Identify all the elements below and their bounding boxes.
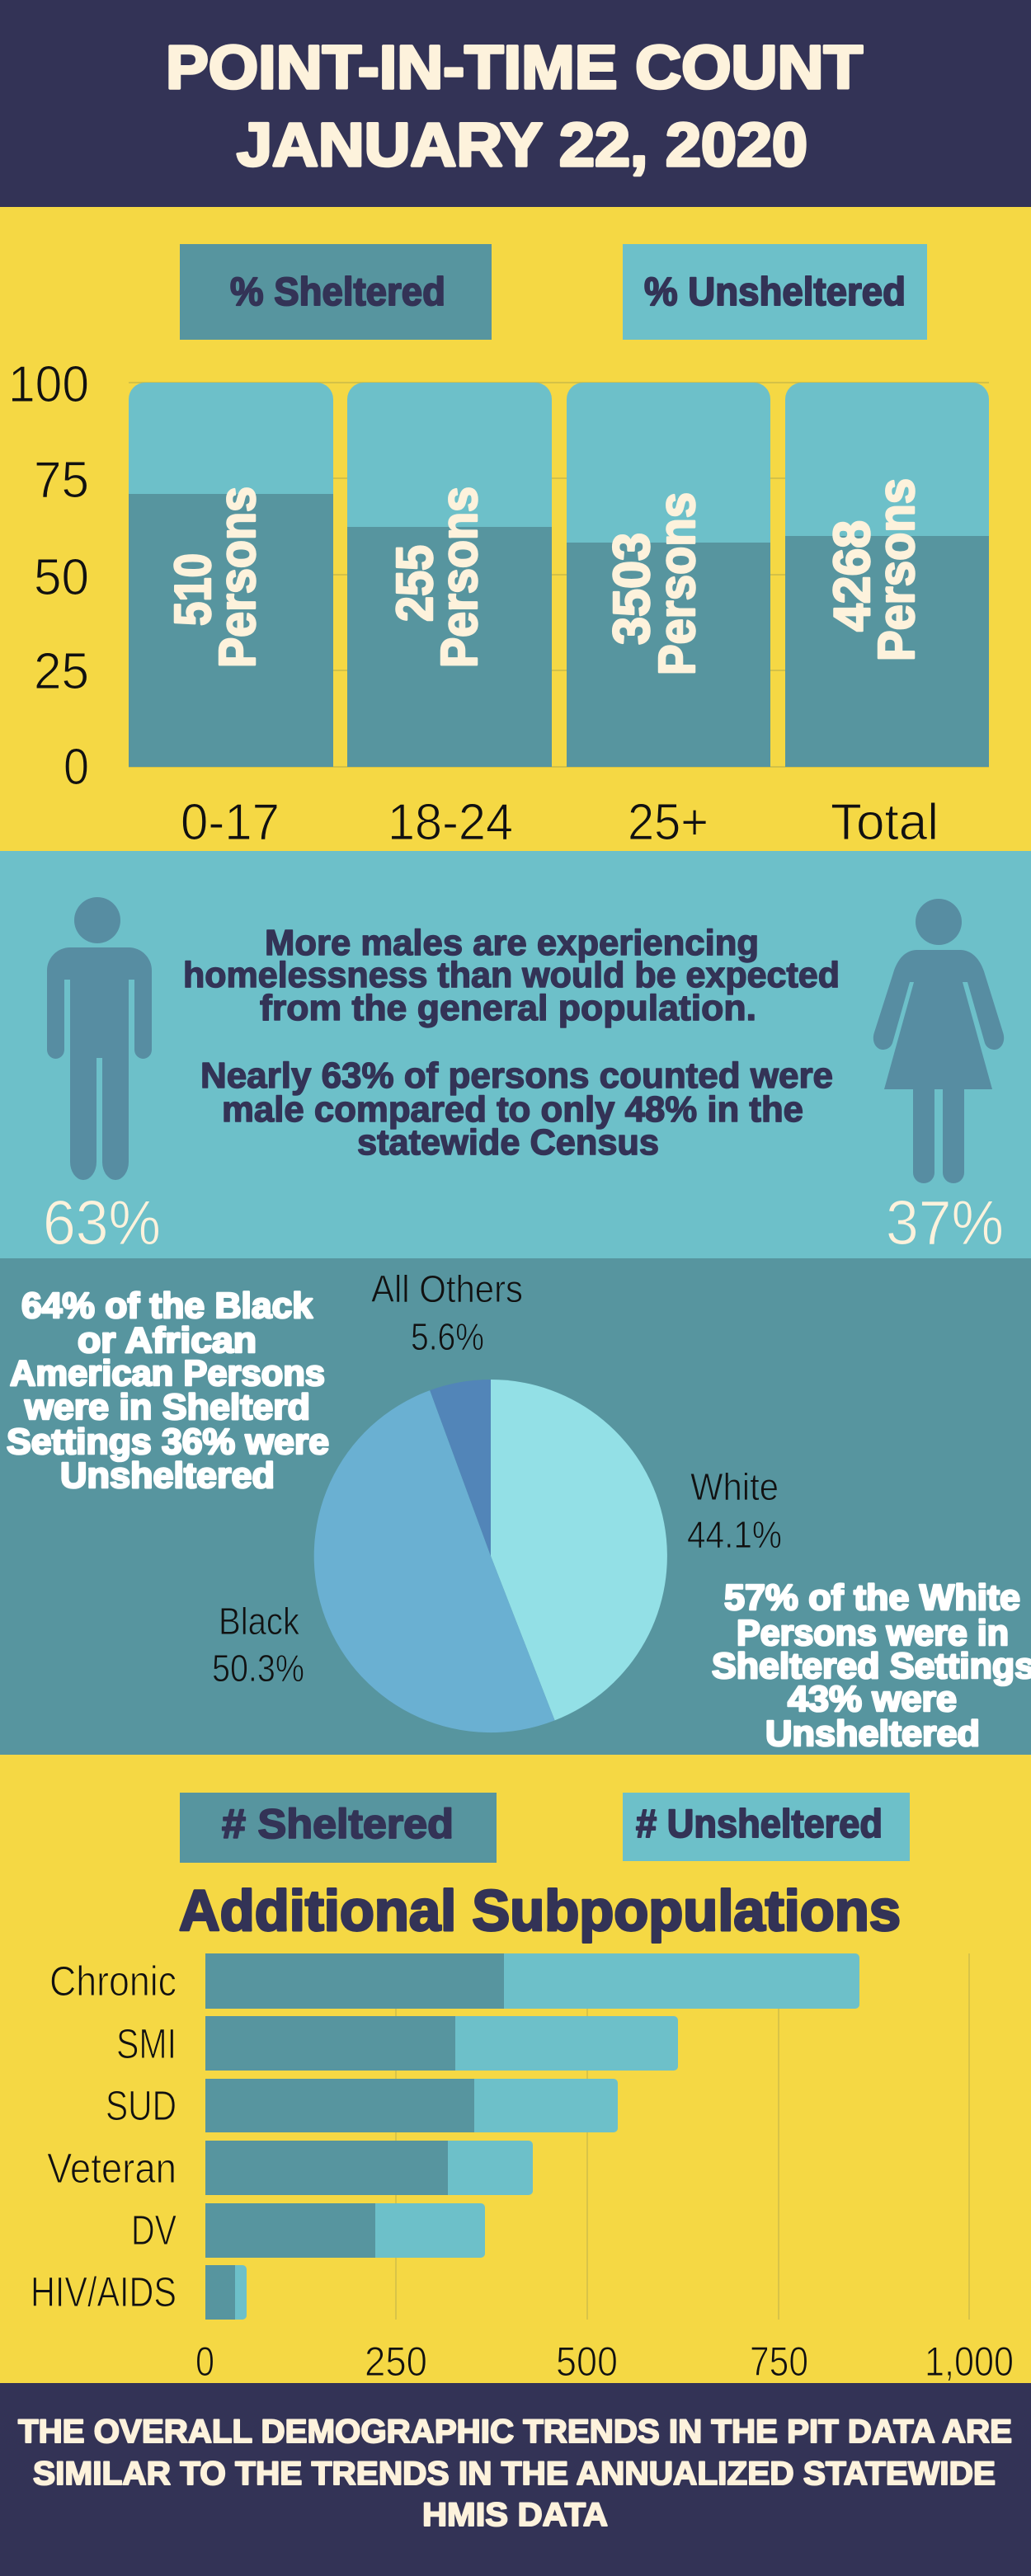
callout: Black or African American persons: or African <box>78 1320 257 1361</box>
bar: 25+: Persons <box>649 492 706 675</box>
category labels: SUD <box>106 2082 177 2129</box>
y axis labels: 100 <box>8 356 89 413</box>
callout: Black or African American persons <box>7 1286 329 1496</box>
category labels <box>31 1958 177 2315</box>
pie labels: 44.1% <box>687 1513 782 1556</box>
legend: number sheltered <box>180 1793 497 1863</box>
bar: 0-17: Persons <box>209 487 266 668</box>
bar: 18-24 <box>347 383 552 767</box>
callout: Black or African American persons: were in Shelterd <box>24 1387 310 1427</box>
legend: percent sheltered: % Sheltered <box>230 270 445 314</box>
callout: White persons: 57% of the White <box>724 1577 1020 1618</box>
footer statement <box>18 2414 1012 2533</box>
heading: additional subpopulations: Additional Subpopulations <box>179 1878 901 1943</box>
stacked bar chart: sheltered share by age <box>8 356 989 851</box>
legend: number unsheltered: # Unsheltered <box>636 1803 883 1846</box>
callout: White persons: Sheltered Settings <box>712 1646 1031 1686</box>
title: POINT-IN-TIME COUNT <box>166 33 863 101</box>
bar: 18-24: Persons <box>431 487 488 668</box>
category labels: DV <box>131 2207 177 2254</box>
callout: Black or African American persons: American Persons <box>10 1353 325 1394</box>
bar: total: Persons <box>869 478 925 661</box>
bar: SUD <box>205 2079 618 2132</box>
bar: 25+ <box>567 383 770 767</box>
x axis labels: 25+ <box>628 794 709 851</box>
category labels: HIV/AIDS <box>31 2268 177 2315</box>
header panel <box>0 0 1031 207</box>
bar: HIV/AIDS <box>205 2265 247 2320</box>
legend: number unsheltered <box>623 1793 910 1861</box>
icon: female figure <box>873 899 1004 1183</box>
callout: White persons: Unsheltered <box>765 1713 980 1754</box>
footer panel <box>0 2383 1031 2576</box>
footer statement: SIMILAR TO THE TRENDS IN THE ANNUALIZED STATEWIDE <box>33 2456 996 2492</box>
legend: percent unsheltered: % Unsheltered <box>644 270 906 314</box>
pie labels: Black <box>219 1600 300 1643</box>
text block: male share explanation: male compared to only 48% in the <box>222 1089 803 1130</box>
stat: 37% female: 37% <box>886 1188 1004 1258</box>
bar: DV <box>205 2203 485 2258</box>
x axis labels: 0-17 <box>181 794 280 851</box>
panel: race breakdown <box>0 1258 1031 1755</box>
category labels: SMI <box>116 2020 177 2067</box>
bar: Veteran <box>205 2141 533 2195</box>
category labels: Chronic <box>49 1958 177 2005</box>
text block: male share explanation: from the general population. <box>260 988 756 1028</box>
y axis labels: 75 <box>34 452 89 509</box>
text block: male share explanation: homelessness than would be expected <box>183 955 840 995</box>
y axis labels: 25 <box>34 643 89 700</box>
pie labels <box>212 1267 782 1690</box>
pie labels: All Others <box>371 1267 523 1310</box>
bar: 25+: 3503 <box>604 533 661 645</box>
text block: male share explanation: statewide Census <box>357 1122 659 1163</box>
callout: White persons: Persons were in <box>737 1613 1009 1653</box>
pie labels: White <box>690 1465 779 1508</box>
horizontal bar chart: subpopulations <box>31 1953 1014 2385</box>
value axis labels: 1,000 <box>925 2339 1014 2385</box>
text block: male share explanation: More males are experiencing <box>265 923 759 963</box>
legend: number sheltered: # Sheltered <box>222 1801 454 1847</box>
legend: percent sheltered <box>180 244 492 340</box>
pie chart <box>314 1380 667 1732</box>
bar: 18-24: 255 <box>387 545 444 622</box>
title <box>166 33 863 179</box>
x axis labels: 18-24 <box>388 794 513 851</box>
bar: Chronic <box>205 1953 859 2009</box>
pie labels: 50.3% <box>212 1647 304 1690</box>
value axis labels: 0 <box>195 2339 214 2385</box>
value axis labels: 500 <box>556 2339 618 2385</box>
y axis labels <box>8 356 89 796</box>
bar: total: 4268 <box>824 520 881 632</box>
callout: Black or African American persons: 64% of the Black <box>21 1286 313 1326</box>
x axis labels <box>181 794 939 851</box>
title: JANUARY 22, 2020 <box>237 110 807 179</box>
bar: 0-17 <box>129 383 333 767</box>
bar: SMI <box>205 2016 678 2071</box>
bar: total <box>785 383 989 767</box>
value axis labels: 250 <box>365 2339 427 2385</box>
text block: male share explanation <box>183 923 840 1163</box>
y axis labels: 0 <box>64 739 89 796</box>
category labels: Veteran <box>47 2145 177 2192</box>
legend: percent unsheltered <box>623 244 927 340</box>
stat: 63% male: 63% <box>43 1188 161 1258</box>
callout: Black or African American persons: Settings 36% were <box>7 1422 329 1462</box>
callout: Black or African American persons: Unsheltered <box>60 1455 275 1496</box>
value axis labels <box>195 2339 1014 2385</box>
footer statement: HMIS DATA <box>422 2497 608 2533</box>
callout: White persons: 43% were <box>788 1679 957 1719</box>
bar: 0-17: 510 <box>165 553 222 626</box>
pie labels: 5.6% <box>411 1315 484 1358</box>
icon: male figure <box>47 897 152 1180</box>
footer statement: THE OVERALL DEMOGRAPHIC TRENDS IN THE PIT DATA ARE <box>18 2414 1012 2450</box>
value axis labels: 750 <box>750 2339 808 2385</box>
y axis labels: 50 <box>34 549 89 606</box>
callout: White persons <box>712 1577 1031 1754</box>
text block: male share explanation: Nearly 63% of persons counted were <box>200 1055 833 1096</box>
panel: gender comparison <box>0 851 1031 1258</box>
x axis labels: Total <box>831 794 939 851</box>
